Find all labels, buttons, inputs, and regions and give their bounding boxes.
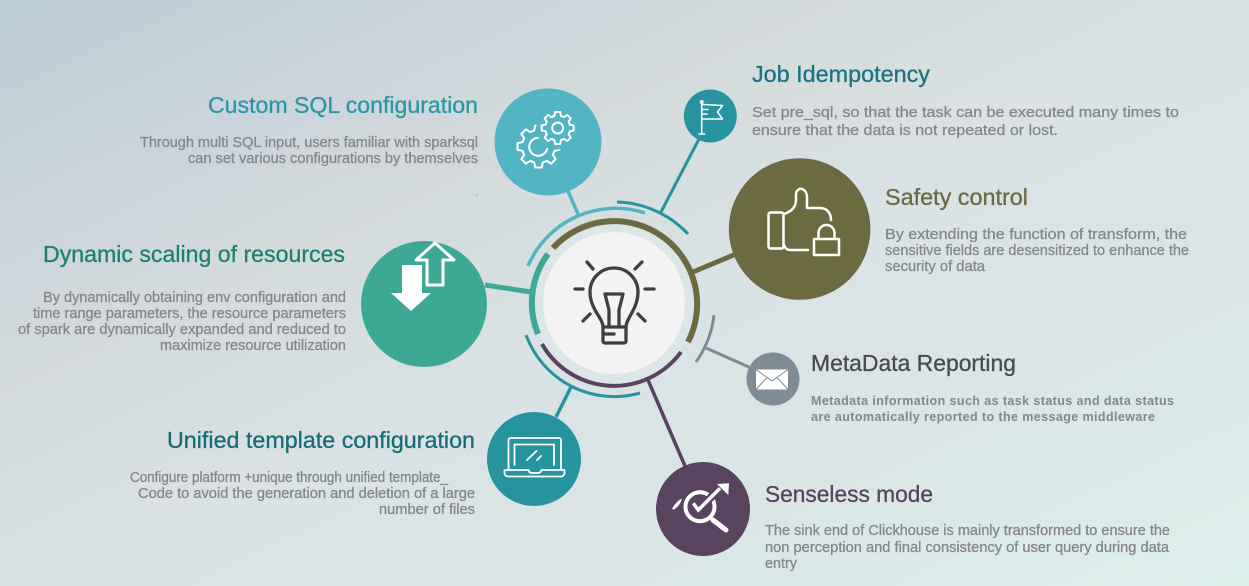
title: Unified template configuration: [167, 427, 475, 453]
description: non perception and final consistency of user query during data: [765, 540, 1170, 556]
node circle: [494, 88, 602, 196]
description: [811, 394, 1174, 424]
icon: envelope: [756, 370, 788, 390]
description: [765, 523, 1170, 572]
title: Dynamic scaling of resources: [43, 241, 345, 267]
title: MetaData Reporting: [811, 350, 1016, 376]
description: [752, 104, 1179, 139]
description: [885, 227, 1189, 275]
title: Safety control: [885, 184, 1028, 210]
description: The sink end of Clickhouse is mainly transformed to ensure the: [765, 523, 1170, 539]
description: Through multi SQL input, users familiar with sparksql: [140, 135, 478, 151]
icon: laptop: [504, 438, 564, 477]
description: number of files: [379, 502, 475, 518]
description: By dynamically obtaining env configuration and: [43, 290, 346, 306]
description: Metadata information such as task status and data status: [811, 394, 1174, 408]
panel: custom SQL configuration: [140, 88, 602, 214]
hub arc: grey: [696, 315, 714, 362]
hub white disc: [543, 232, 685, 374]
panel: senseless mode: [648, 380, 1170, 572]
description: security of data: [885, 259, 986, 275]
connector: [556, 387, 571, 417]
hub arc: olive: [553, 221, 697, 342]
description: sensitive fields are desensitized to enhance the: [885, 243, 1189, 259]
hub arc: teal outer top: [617, 202, 688, 234]
title: Senseless mode: [765, 481, 933, 507]
description: ensure that the data is not repeated or lost.: [752, 122, 1058, 139]
connector: [706, 348, 751, 368]
description: [130, 470, 475, 518]
icon: thumbs up with lock: [768, 189, 839, 255]
title: Job Idempotency: [752, 61, 930, 87]
panel: safety control: [693, 158, 1189, 300]
panel: dynamic scaling of resources: [18, 241, 531, 367]
stray dot: [476, 194, 478, 196]
node circle: [487, 412, 581, 506]
connector: [693, 254, 736, 272]
central hub: [532, 221, 696, 385]
connector: [661, 139, 699, 212]
description: entry: [765, 556, 798, 572]
description: time range parameters, the resource parameters: [33, 306, 346, 322]
connector: [648, 380, 685, 466]
icon: up and down arrows: [391, 243, 454, 311]
description: By extending the function of transform, the: [885, 227, 1187, 243]
node circle: [684, 90, 737, 142]
panel: job idempotency: [661, 61, 1179, 212]
icon: gears: [518, 106, 579, 168]
description: can set various configurations by themselves: [188, 151, 478, 167]
icon: light bulb: [575, 262, 654, 343]
title: Custom SQL configuration: [208, 92, 478, 118]
node circle: [361, 241, 487, 367]
description: are automatically reported to the message middleware: [811, 410, 1155, 424]
description: Code to avoid the generation and deletion of a large: [138, 486, 475, 502]
node circle: [729, 158, 870, 300]
description: [18, 290, 346, 354]
node circle: [656, 462, 750, 556]
node circle: [746, 352, 800, 406]
connector: [485, 285, 531, 292]
panel: metadata reporting: [706, 348, 1174, 424]
description: Set pre_sql, so that the task can be executed many times to: [752, 104, 1179, 121]
icon: magnifier with check: [672, 483, 729, 530]
connector: [568, 191, 578, 214]
description: maximize resource utilization: [160, 338, 346, 354]
panel: unified template configuration: [130, 387, 581, 518]
hub backing disc: [532, 221, 696, 385]
icon: flag: [699, 101, 722, 134]
hub arc: purple: [542, 344, 681, 386]
description: of spark are dynamically expanded and reduced to: [18, 322, 346, 338]
hub arc: light blue: [528, 208, 645, 266]
hub arc: green: [532, 254, 548, 334]
description: Configure platform +unique through unified template_: [130, 470, 449, 486]
hub arc: teal outer bottom: [526, 335, 640, 397]
description: [140, 135, 478, 167]
